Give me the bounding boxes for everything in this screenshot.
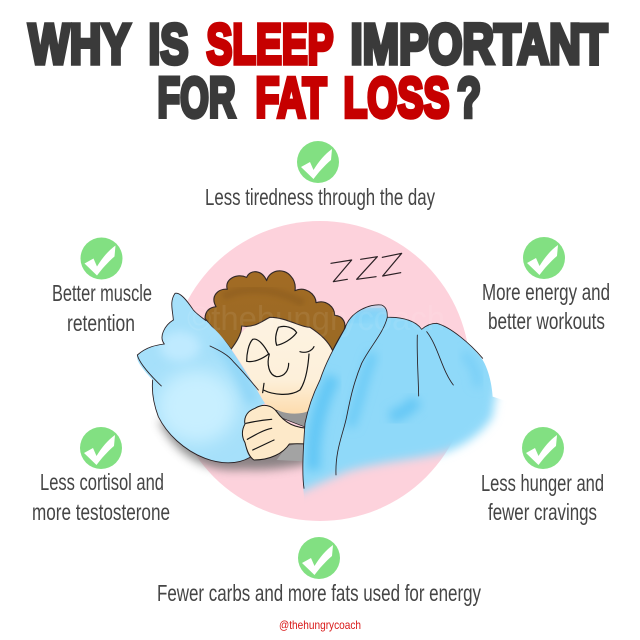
icon: check: [297, 141, 339, 183]
title line 1: WHY: [28, 12, 130, 76]
title line 1: SLEEP: [206, 12, 334, 76]
label: [52, 280, 152, 336]
title line 2: FAT: [256, 66, 326, 129]
face: [231, 315, 333, 414]
label: more testosterone: [32, 499, 170, 525]
hand: [242, 405, 312, 460]
benefit: muscle retention: [52, 238, 152, 336]
label: fewer cravings: [488, 499, 597, 525]
label: Less tiredness through the day: [205, 184, 435, 210]
title line 2: FOR: [158, 66, 236, 129]
neck and shirt: [275, 410, 312, 428]
icon: check: [298, 537, 340, 579]
title line 2: ?: [457, 66, 481, 129]
benefit: fats: [157, 537, 481, 606]
hair: [205, 271, 345, 351]
pillow: [137, 293, 265, 463]
blanket: [293, 305, 503, 495]
benefit: energy: [482, 237, 610, 334]
label: [482, 279, 610, 334]
pink circle background: [170, 221, 470, 521]
illustration: sleeping person: [137, 253, 503, 495]
blanket shading: [313, 377, 333, 470]
soft blanket body: [293, 307, 503, 495]
zzz: [331, 253, 402, 282]
face details: [247, 326, 314, 394]
credit handle: @thehungrycoach: [279, 618, 361, 632]
pillow shadow: [158, 420, 308, 470]
icon: check: [80, 238, 122, 280]
label: Less cortisol and: [40, 469, 164, 495]
label: [481, 470, 604, 525]
benefit: hunger: [481, 427, 604, 525]
icon: check: [80, 427, 122, 469]
title line 2: LOSS: [344, 66, 450, 129]
benefit: cortisol: [32, 427, 170, 525]
faint watermark: ©thehungrycoach: [187, 300, 445, 338]
label: Fewer carbs and more fats used for energy: [157, 580, 481, 606]
title line 1: IS: [148, 12, 188, 76]
title: [28, 12, 608, 129]
title line 1: [28, 12, 608, 76]
label: retention: [67, 310, 135, 336]
title line 2: [158, 66, 481, 129]
label: Better muscle: [52, 280, 152, 306]
label: [32, 469, 170, 525]
icon: check: [522, 427, 564, 469]
grey under arm: [277, 440, 310, 462]
benefit: top: [205, 141, 435, 210]
icon: check: [523, 237, 565, 279]
blanket outlines: [303, 305, 387, 488]
